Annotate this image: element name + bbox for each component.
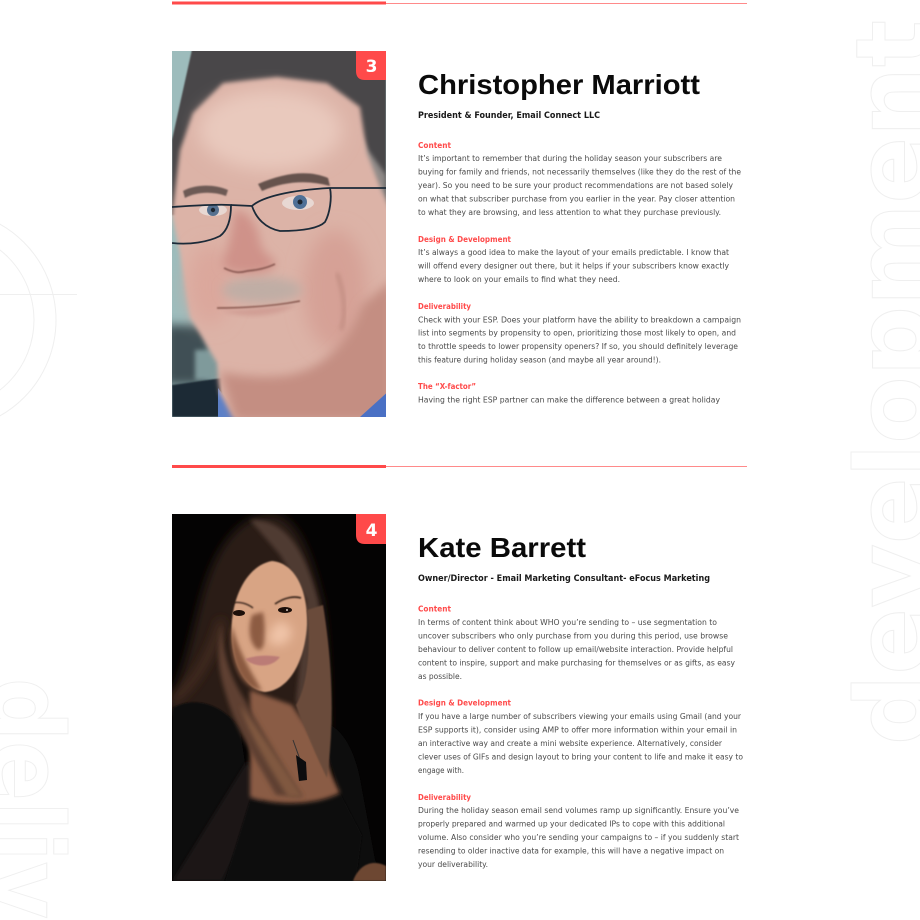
section: design and development: engage with. [418, 766, 464, 775]
section: deliverability: resending to older inactive data for example, this will have a negative impact on [418, 846, 724, 856]
section: deliverability: your deliverability. [418, 860, 488, 869]
section: deliverability [418, 302, 741, 364]
section: content: Content [418, 604, 451, 614]
section: content: In terms of content think about WHO you’re sending to – use segmentation to [418, 618, 717, 627]
section: design and development: where to look on your emails to find what they need. [418, 275, 620, 284]
section: deliverability: Deliverability [418, 302, 472, 311]
badge: number 4 [356, 514, 386, 544]
section: design and development [418, 235, 729, 284]
section: design and development [418, 698, 743, 775]
section: deliverability: this feature during holiday season (and maybe all year around!). [418, 356, 661, 364]
name heading: Kate Barrett [418, 532, 586, 563]
section: deliverability: Check with your ESP. Does your platform have the ability to breakdown a campaign [418, 316, 741, 324]
middle divider rule [172, 465, 747, 468]
section: deliverability: list into segments by propensity to open, prioritizing those most likely to open, and [418, 328, 736, 338]
section: design and development: Design & Development [418, 698, 511, 708]
section: design and development: If you have a large number of subscribers viewing your emails using Gmail (and your [418, 712, 742, 721]
section: the X-factor [418, 382, 720, 404]
section: content: Content [418, 141, 451, 150]
name heading: Christopher Marriott [418, 69, 700, 100]
section: the X-factor: The “X-factor” [418, 382, 476, 391]
section: design and development: an interactive way and create a mini website experience. Alternatively, consider [418, 739, 723, 748]
section: content: to what they are browsing, and less attention to what they purchase previously. [418, 208, 721, 217]
section: content: on what that subscriber purchase from you earlier in the year. Pay closer attention [418, 194, 735, 204]
section: content: content to inspire, support and make purchasing for themselves or as gifts, as easy [418, 658, 735, 668]
section: deliverability: During the holiday season email send volumes ramp up significantly. Ensure you’ve [418, 806, 739, 815]
photo: Kate Barrett portrait [165, 514, 386, 881]
section: deliverability: Deliverability [418, 793, 472, 802]
panel: Kate Barrett [165, 514, 743, 881]
job title: President & Founder, Email Connect LLC [418, 110, 600, 120]
section: content [418, 141, 741, 217]
section: content: It’s important to remember that during the holiday season your subscribers are [418, 154, 722, 163]
section: content: buying for family and friends, not necessarily themselves (like they do the rest of the [418, 168, 741, 176]
section: deliverability: to throttle speeds to lower propensity openers? If so, you should definitely leverage [418, 342, 738, 351]
badge: number 3 [356, 51, 386, 80]
panel: Christopher Marriott [165, 45, 741, 420]
section: content: behaviour to deliver content to follow up email/website interaction. Provide helpful [418, 645, 733, 654]
background watermark: circle target [0, 210, 77, 430]
section: content: as possible. [418, 672, 462, 681]
section: design and development: will offend every designer out there, but it helps if your subscribers know exactly [418, 262, 729, 270]
section: the X-factor: Having the right ESP partner can make the difference between a great holiday [418, 396, 720, 404]
section: deliverability: properly prepared and warmed up your dedicated IPs to cope with this additional [418, 820, 725, 828]
badge: number 4: 4 [366, 521, 378, 541]
section: design and development: clever uses of GIFs and design layout to bring your content to life and make it easy to [418, 752, 743, 762]
photo: Christopher Marriott portrait [165, 45, 392, 420]
section: design and development: It’s always a good idea to make the layout of your emails predictable. I know that [418, 248, 729, 257]
badge: number 3: 3 [366, 57, 377, 77]
section: content: uncover subscribers who only purchase from you during this period, use browse [418, 632, 728, 640]
section: content [418, 604, 735, 681]
section: design and development: Design & Development [418, 235, 511, 244]
job title: Owner/Director - Email Marketing Consultant- eFocus Marketing [418, 573, 710, 583]
section: design and development: ESP supports it), consider using AMP to offer more information within your email in [418, 726, 737, 734]
section: content: year). So you need to be sure your product recommendations are not based solely [418, 181, 733, 190]
section: deliverability [418, 793, 739, 869]
top divider rule [172, 2, 747, 4]
section: deliverability: volume. Also consider who you’re sending your campaigns to – if you suddenly start [418, 833, 739, 842]
